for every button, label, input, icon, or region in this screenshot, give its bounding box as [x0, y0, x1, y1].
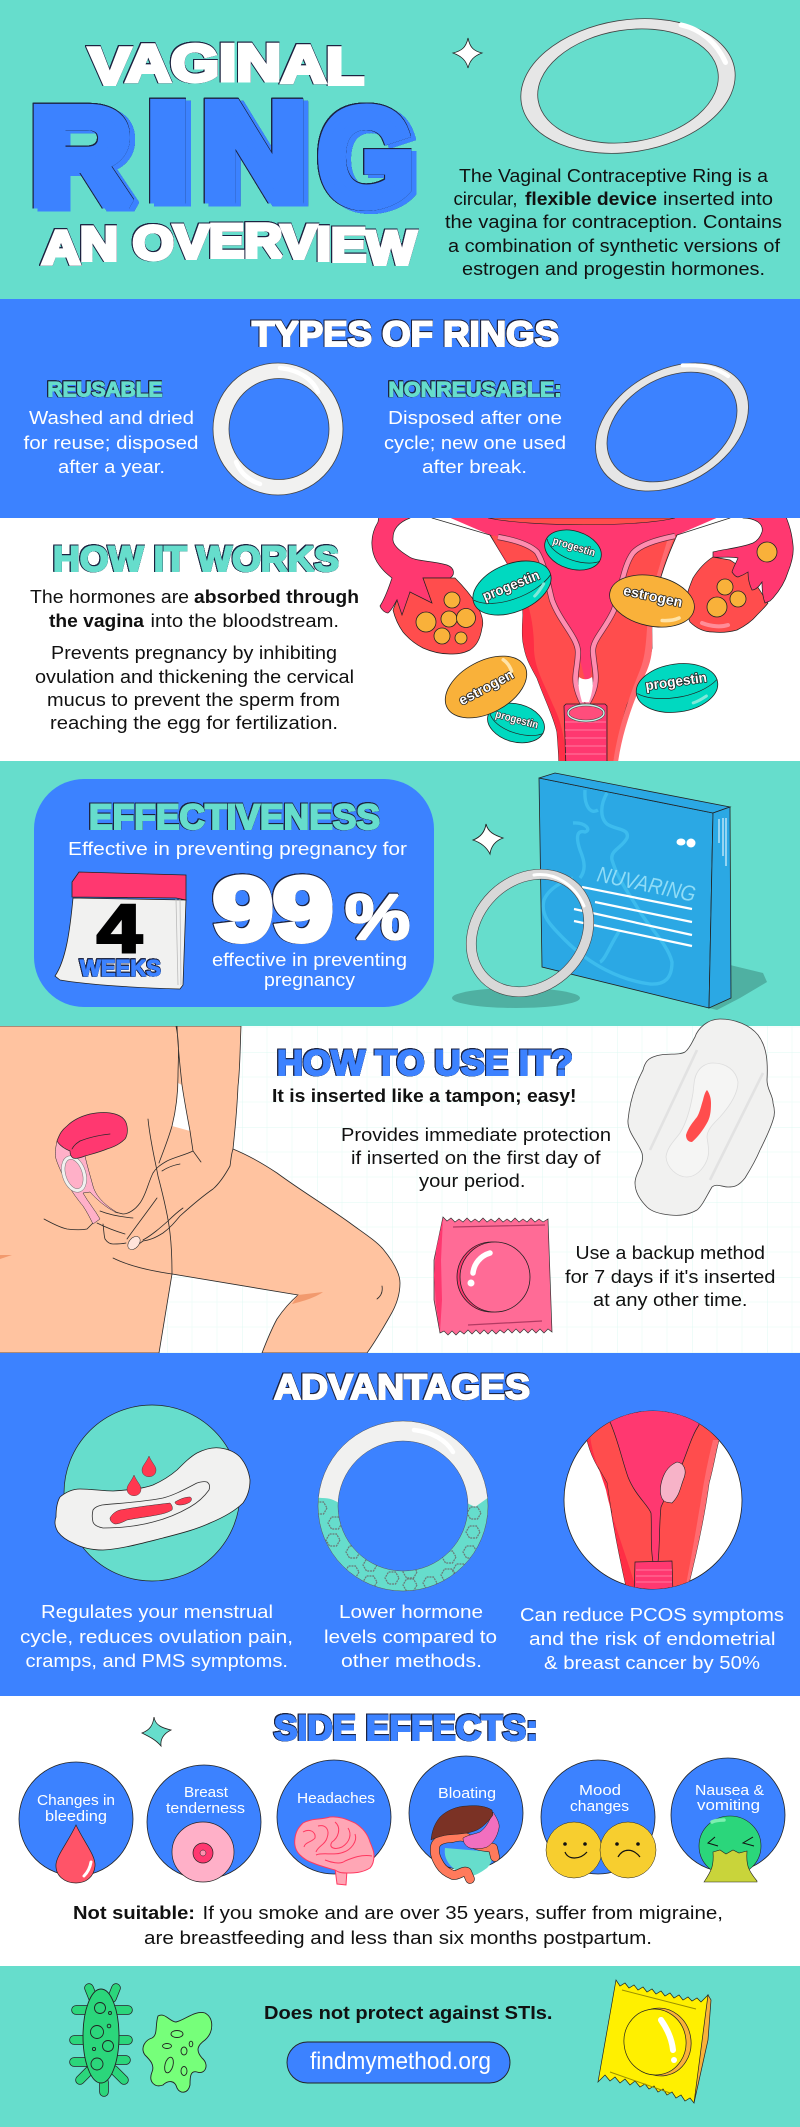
stat: 99%: 99	[213, 860, 333, 960]
vaginal tract	[55, 1141, 118, 1224]
panel: side effects	[0, 1696, 800, 1966]
tube edges	[432, 518, 730, 535]
pill: progestin small bottom: progestin	[494, 709, 540, 732]
nonreusable ring text	[384, 378, 566, 477]
immediate protection text: if inserted on the first day of	[351, 1148, 602, 1168]
backup method text: Use a backup method	[576, 1243, 765, 1263]
blue card	[34, 779, 434, 1007]
body lines	[44, 1026, 382, 1299]
hexagon texture	[313, 1502, 481, 1591]
uterus fold	[72, 1134, 110, 1149]
advantage text: cycle: cramps, and PMS symptoms.	[26, 1651, 288, 1671]
pill: estrogen left	[444, 656, 528, 718]
heading: how to use it: HOW TO USE IT?	[277, 1044, 573, 1083]
droplets	[142, 1456, 156, 1477]
knee shade	[292, 1292, 323, 1304]
backup method text	[565, 1243, 776, 1310]
icon: rod bacterium	[74, 1988, 128, 2092]
box top	[539, 773, 730, 813]
not suitable note: Not suitable:	[73, 1903, 195, 1923]
brain stem	[335, 1868, 347, 1885]
illustration: body inserting ring	[0, 1026, 400, 1353]
side effect: headaches: Headaches	[297, 1790, 375, 1807]
title: vaginal ring an overview: VAGINAL	[89, 34, 364, 96]
panel: footer	[0, 1966, 800, 2127]
how it works text: the vagina	[49, 611, 145, 631]
how it works text: The hormones are	[30, 587, 189, 607]
right wall highlight	[612, 538, 674, 770]
side effect: nausea and vomiting	[671, 1758, 785, 1882]
pill: progestin small bottom	[487, 702, 545, 744]
icon: sanitary pad	[628, 1019, 774, 1215]
cervix	[578, 677, 593, 702]
condom circle	[457, 1242, 527, 1312]
liver	[431, 1806, 493, 1840]
not suitable note: are breastfeeding and less than six months postpartum.	[144, 1928, 652, 1948]
icon: condom wrapper yellow	[598, 1980, 711, 2103]
intro description	[445, 166, 782, 279]
ring	[440, 843, 620, 1023]
stomach	[463, 1812, 499, 1849]
pad stain	[686, 1090, 711, 1142]
advantage text: PCOS	[520, 1605, 784, 1673]
illustration: uterus with hormone pills	[372, 510, 793, 770]
pill: estrogen right	[609, 574, 695, 628]
box side stripes	[719, 818, 726, 866]
title: vaginal ring an overview	[30, 34, 417, 274]
heading: how it works: HOW IT WORKS	[53, 540, 339, 579]
advantage text: PCOS: Can reduce PCOS symptoms	[520, 1605, 784, 1625]
fibroid	[660, 1462, 685, 1503]
uterus cavity	[450, 518, 716, 680]
icon: calendar 4 weeks: WEEKS	[80, 955, 161, 981]
side effect: bloating	[409, 1756, 523, 1879]
body silhouette	[0, 1026, 400, 1353]
illustration: pad on teal circle	[55, 1405, 250, 1581]
how it works text: absorbed through	[194, 587, 359, 607]
heading: types of rings: TYPES OF RINGS	[252, 315, 559, 354]
brain	[295, 1817, 374, 1873]
stat caption: effective in preventing	[212, 950, 407, 970]
nonreusable ring text: cycle; new one used	[384, 433, 566, 453]
pill: progestin right: progestin	[644, 669, 708, 693]
brain folds	[303, 1822, 372, 1863]
immediate protection text	[341, 1125, 611, 1191]
intro description: flexible device	[525, 189, 657, 209]
ring shadow	[452, 988, 580, 1008]
title: vaginal ring an overview: I	[146, 75, 190, 227]
reusable ring text: REUSABLE	[48, 378, 162, 402]
stat caption: pregnancy	[264, 970, 355, 990]
box lines	[574, 887, 692, 946]
side effect: nausea and vomiting: vomiting	[697, 1797, 760, 1814]
uterus	[57, 1112, 127, 1158]
side effect: breast tenderness: Breast	[184, 1784, 229, 1801]
icon: sparkle	[473, 824, 503, 854]
side effect: bloating: Bloating	[438, 1785, 496, 1802]
icon: teal sparkle	[142, 1717, 171, 1746]
right ovary highlight	[702, 623, 728, 626]
backup method text: for 7 days if it's inserted	[565, 1267, 776, 1287]
pill: progestin large: progestin	[480, 567, 542, 604]
how it works text	[30, 587, 359, 733]
box decoration	[543, 790, 672, 984]
panel: effectiveness	[0, 761, 800, 1026]
pill: estrogen left: estrogen	[456, 666, 516, 708]
left ovary eggs	[416, 592, 476, 644]
how it works text: into the bloodstream.	[150, 611, 339, 631]
how it works text: reaching the egg for fertilization.	[50, 713, 338, 733]
nonreusable ring text: after break.	[422, 457, 527, 477]
left arm	[372, 510, 453, 615]
icon: calendar 4 weeks	[55, 872, 186, 989]
fingernail	[128, 1236, 140, 1250]
effectiveness subtitle: Effective in preventing pregnancy for	[68, 839, 407, 859]
left ovary	[393, 578, 483, 654]
reusable ring text: Washed and dried	[29, 408, 194, 428]
pad stain	[110, 1503, 172, 1524]
intro description: estrogen and progestin hormones.	[462, 259, 765, 279]
advantage text: hormone levels	[324, 1602, 497, 1671]
colon	[435, 1836, 495, 1879]
advantage text: hormone levels: Lower hormone	[339, 1602, 483, 1622]
how it works text: mucus to prevent the sperm from	[47, 690, 340, 710]
top sliver	[488, 518, 675, 525]
icon: sparkle	[453, 38, 482, 68]
stat caption	[212, 950, 407, 990]
advantage text: cycle: Regulates your menstrual	[41, 1602, 273, 1622]
right ovary eggs	[707, 542, 777, 617]
how it works text: ovulation and thickening the cervical	[35, 667, 354, 687]
panel: types of rings	[0, 299, 800, 518]
icon: calendar 4 weeks: 4	[97, 891, 142, 967]
panel: intro	[0, 0, 800, 300]
intro description: The Vaginal Contraceptive Ring is a	[459, 166, 769, 186]
pill: progestin large	[472, 560, 552, 616]
advantage text: cycle	[20, 1602, 293, 1671]
illustration: ring with hormone pattern	[313, 1421, 488, 1591]
panel: advantages	[0, 1353, 800, 1696]
not suitable note: If you smoke and are over 35 years, suffer from migraine,	[202, 1903, 723, 1923]
pill: progestin top	[544, 530, 602, 570]
hip shade	[0, 1255, 12, 1259]
box brand text: NUVARING	[595, 861, 698, 907]
white gap	[172, 1083, 190, 1131]
vagina	[564, 704, 608, 761]
wrapper creases	[453, 1225, 545, 1325]
tract right	[587, 536, 675, 704]
immediate protection text: your period.	[419, 1171, 526, 1191]
side effect: mood changes	[541, 1760, 656, 1878]
heading: effectiveness: EFFECTIVENESS	[89, 798, 380, 837]
backup method text: at any other time.	[593, 1290, 748, 1310]
nonreusable ring text: NONREUSABLE:	[388, 378, 562, 402]
pill: progestin right	[636, 663, 718, 713]
right arm	[713, 510, 793, 603]
ring in tract	[61, 1156, 87, 1192]
intro description: a combination of synthetic versions of	[448, 236, 781, 256]
illustration: nonreusable ring	[573, 337, 771, 517]
side effect: breast tenderness: tenderness	[166, 1800, 245, 1817]
intro description: circular,	[454, 189, 518, 209]
side effect: mood changes: changes	[570, 1798, 629, 1815]
box shadow	[542, 965, 767, 1010]
icon: amoeba	[143, 2012, 212, 2092]
panel: how to use it	[0, 1019, 800, 1353]
pad core	[666, 1063, 738, 1177]
box front	[539, 778, 713, 1008]
stat: 99%	[213, 860, 410, 960]
advantage text: hormone levels: other methods.	[341, 1651, 482, 1671]
website button	[287, 2042, 510, 2083]
how it works text: Prevents pregnancy by inhibiting	[51, 643, 337, 663]
side effect: bleeding: Changes in	[37, 1792, 115, 1809]
side effect: headaches	[277, 1760, 391, 1885]
subheading: It is inserted like a tampon; easy!	[272, 1086, 576, 1106]
illustration: tilted ring	[511, 4, 745, 168]
advantage text: cycle: cycle, reduces ovulation pain,	[20, 1627, 293, 1647]
pad creases	[650, 1050, 763, 1180]
pill: progestin top: progestin	[551, 535, 597, 559]
illustration: nuvaring box and ring	[440, 773, 767, 1023]
heading: advantages: ADVANTAGES	[274, 1368, 530, 1407]
intro description: the vagina for contraception. Contains	[445, 212, 782, 232]
panel: how it works	[30, 518, 794, 761]
left wall shade	[492, 538, 566, 770]
advantage text: PCOS: & breast cancer by 50%	[544, 1653, 760, 1673]
side effect: nausea and vomiting: Nausea &	[695, 1782, 764, 1799]
advantage text: PCOS: and the risk of endometrial	[529, 1629, 776, 1649]
heading: side effects: SIDE EFFECTS:	[274, 1709, 538, 1748]
uterus walls	[490, 535, 677, 770]
ring in vagina	[568, 705, 604, 721]
side effect: mood changes: Mood	[579, 1782, 621, 1799]
right ovary	[687, 557, 768, 632]
website button: findmymethod.org	[310, 2048, 491, 2075]
intro description: inserted into	[663, 189, 773, 209]
title: vaginal ring an overview: N	[201, 75, 307, 227]
box logo dots	[676, 838, 696, 848]
side effect: bleeding	[19, 1762, 133, 1883]
side effect: bleeding: bleeding	[45, 1808, 107, 1825]
illustration: reusable ring	[213, 363, 343, 495]
immediate protection text: Provides immediate protection	[341, 1125, 611, 1145]
pill: estrogen right: estrogen	[622, 582, 684, 610]
small intestine	[445, 1848, 493, 1877]
side effect: breast tenderness	[147, 1765, 261, 1882]
reusable ring text: after a year.	[58, 457, 165, 477]
STI warning: Does not protect against STIs.	[264, 2003, 552, 2023]
box side	[709, 807, 731, 1008]
not suitable note	[73, 1903, 723, 1948]
advantage text: hormone levels: levels compared to	[324, 1627, 497, 1647]
tract left	[498, 537, 583, 704]
pad inner line	[92, 1482, 210, 1528]
illustration: uterus in circle	[564, 1400, 742, 1595]
reusable ring text	[24, 378, 198, 477]
reusable ring text: for reuse; disposed	[24, 433, 198, 453]
icon: condom wrapper pink	[434, 1217, 552, 1335]
title: vaginal ring an overview: R	[30, 80, 132, 232]
stat: 99%: %	[345, 881, 410, 953]
title: vaginal ring an overview: G	[318, 81, 414, 233]
nonreusable ring text: Disposed after one	[388, 408, 562, 428]
title: vaginal ring an overview: AN OVERVIEW	[42, 214, 417, 274]
wrapper dark edge	[434, 1218, 443, 1332]
